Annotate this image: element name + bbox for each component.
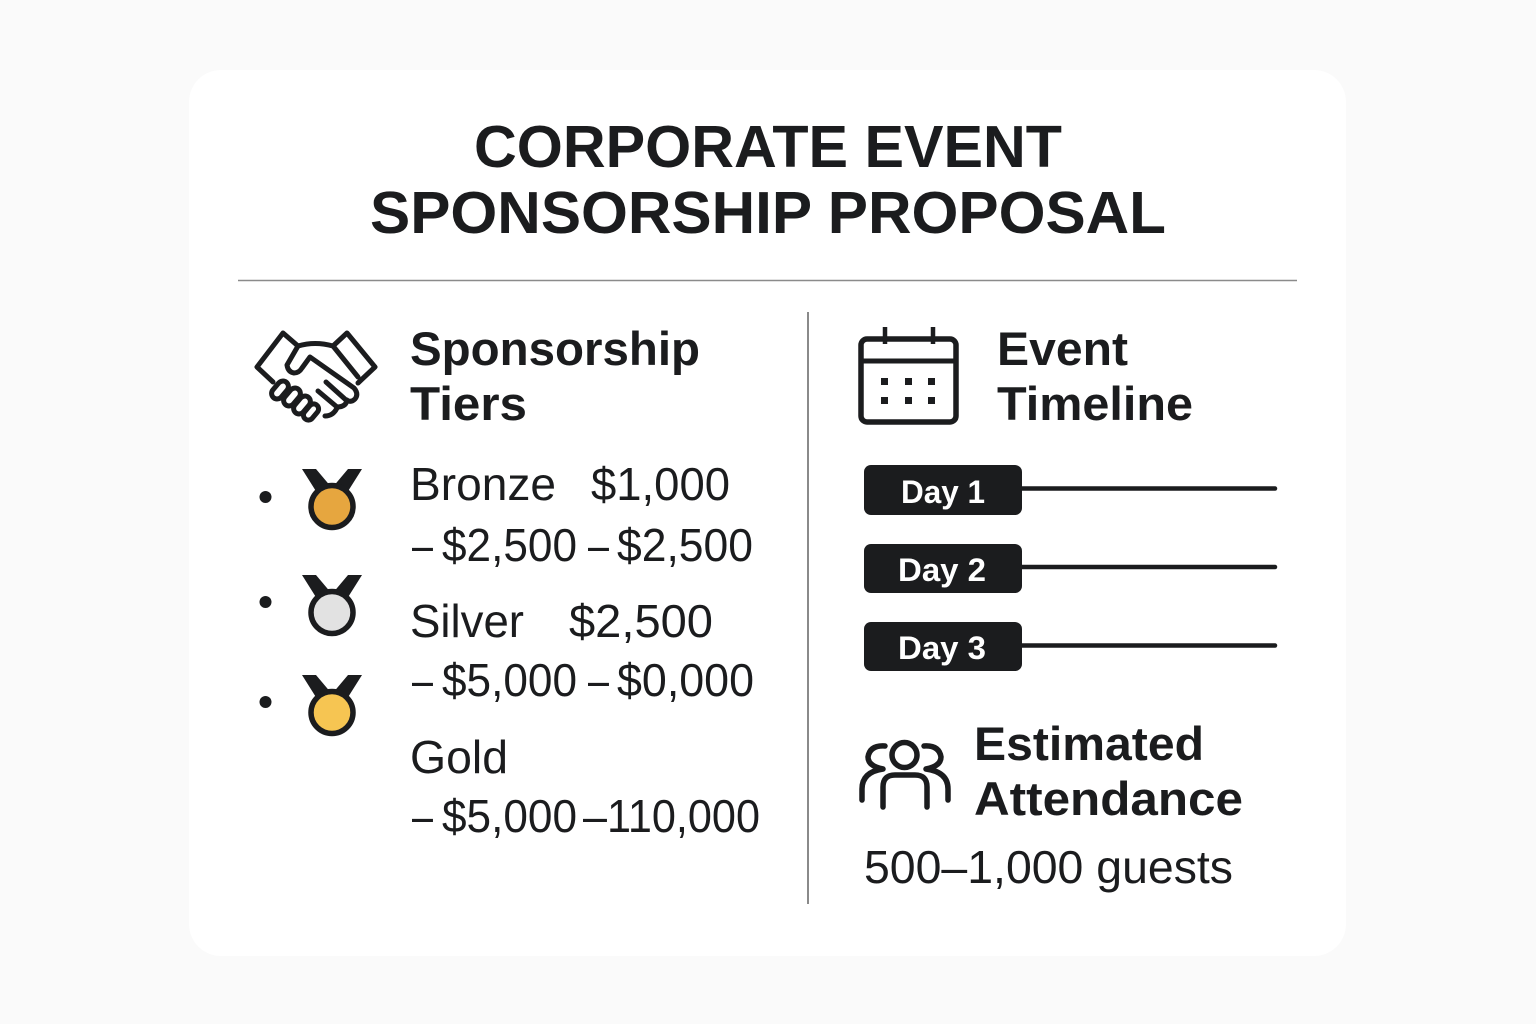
text: attendance figure: 500–1,000 guests — [864, 841, 1233, 893]
heading: sponsorship tiers: Sponsorship — [410, 322, 700, 375]
text: gold tier: Gold — [410, 731, 508, 783]
text: silver tier: – — [412, 654, 433, 706]
bullet: bronze — [260, 491, 272, 503]
icon: calendar — [861, 327, 956, 422]
text: gold tier: $5,000 — [442, 790, 577, 842]
heading: event timeline: Timeline — [997, 377, 1193, 430]
heading: event timeline: Event — [997, 322, 1128, 375]
title — [370, 114, 1166, 246]
text: gold tier — [410, 731, 760, 842]
timeline row: day 3 — [864, 622, 1275, 671]
icon: gold medal — [302, 675, 362, 734]
text: silver tier: – — [588, 654, 609, 706]
heading: estimated attendance — [974, 717, 1243, 825]
text: silver tier: $0,000 — [617, 654, 754, 706]
panel: event timeline — [861, 322, 1275, 893]
text: gold tier: – — [583, 790, 607, 842]
heading: estimated attendance: Estimated — [974, 717, 1204, 770]
text: bronze tier: $1,000 — [591, 458, 730, 510]
timeline row: day 2 — [864, 544, 1275, 593]
heading: sponsorship tiers — [410, 322, 700, 430]
heading: estimated attendance: Attendance — [974, 772, 1243, 825]
text: bronze tier: $2,500 — [617, 519, 753, 571]
title: SPONSORSHIP PROPOSAL — [370, 180, 1166, 246]
timeline row: day 2: Day 2 — [898, 552, 986, 588]
text: bronze tier: – — [412, 519, 433, 571]
timeline row: day 1 — [864, 465, 1275, 515]
title: CORPORATE EVENT — [474, 114, 1062, 180]
panel: sponsorship tiers — [257, 322, 760, 842]
text: silver tier — [410, 595, 754, 706]
text: silver tier: $2,500 — [569, 595, 713, 647]
timeline row: day 1: Day 1 — [901, 474, 985, 510]
bullet: gold — [260, 696, 272, 708]
text: bronze tier: Bronze — [410, 458, 556, 510]
icon: bronze medal — [302, 469, 362, 528]
heading: sponsorship tiers: Tiers — [410, 377, 527, 430]
text: gold tier: 110,000 — [607, 790, 760, 842]
timeline row: day 3: Day 3 — [898, 630, 986, 666]
text: gold tier: – — [412, 790, 433, 842]
panel: card — [189, 70, 1346, 956]
icon: handshake — [257, 333, 375, 422]
text: bronze tier: – — [588, 519, 609, 571]
icon: people — [862, 742, 948, 807]
text: bronze tier — [410, 458, 753, 571]
bullet: silver — [260, 596, 272, 608]
text: silver tier: Silver — [410, 595, 524, 647]
heading: event timeline — [997, 322, 1193, 430]
icon: silver medal — [302, 575, 362, 634]
text: bronze tier: $2,500 — [442, 519, 577, 571]
text: silver tier: $5,000 — [442, 654, 577, 706]
